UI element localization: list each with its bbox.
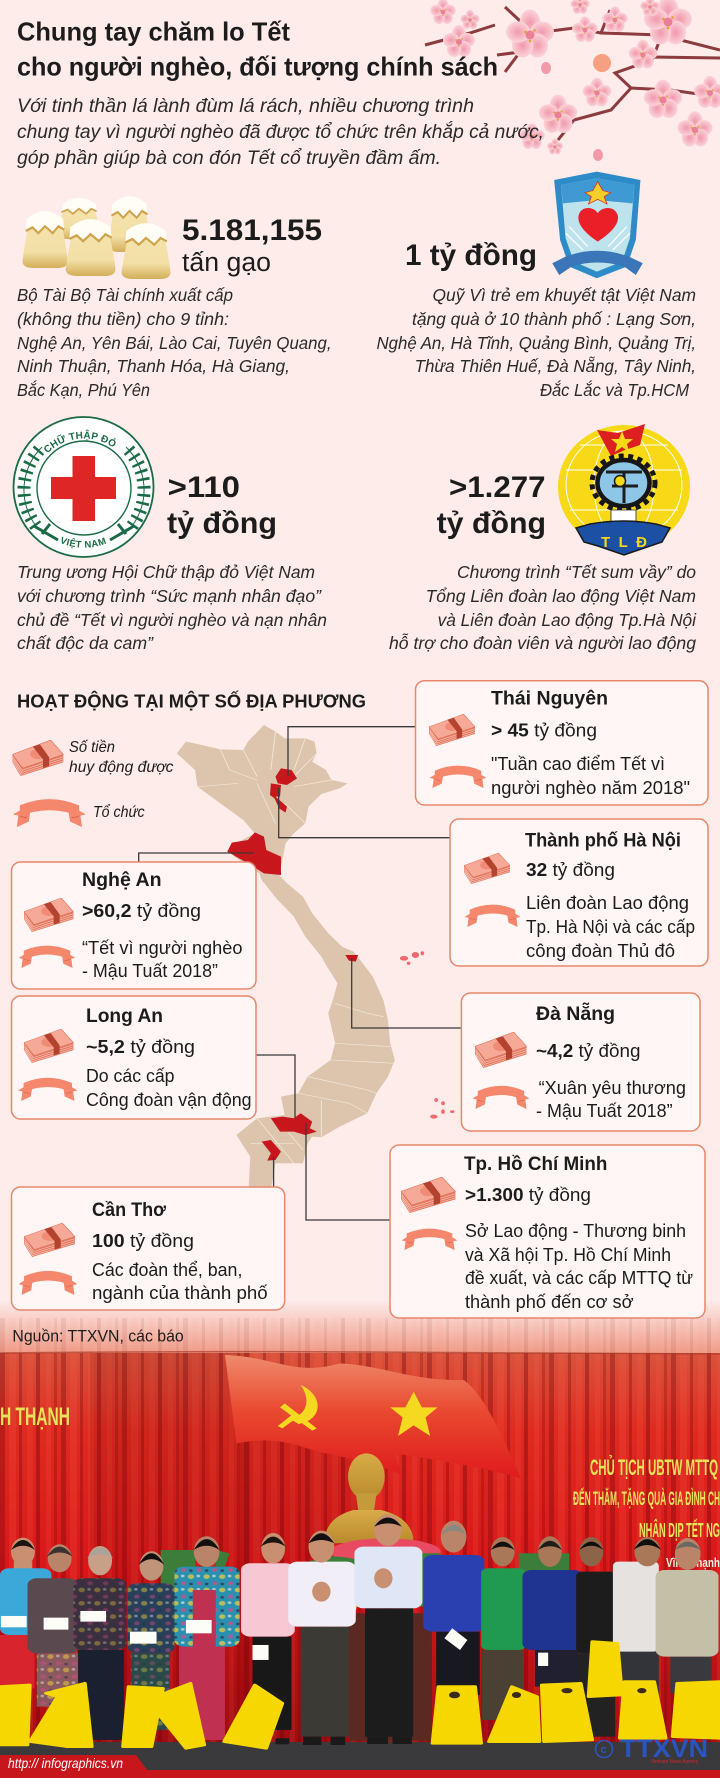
panel: Thái Nguyên: người nghèo năm 2018" (491, 778, 690, 798)
legend: Tổ chức (93, 803, 145, 821)
panel: Hà Nội: công đoàn Thủ đô (526, 941, 675, 961)
panel: TP. Hồ Chí Minh: và Xã hội Tp. Hồ Chí Minh (465, 1245, 671, 1265)
logo: TTXVN: Vietnam News Agency (651, 1759, 698, 1765)
panel: Nghệ An: “Tết vì người nghèo (82, 938, 242, 958)
panel: TP. Hồ Chí Minh: Tp. Hồ Chí Minh (464, 1153, 607, 1175)
text: rice description: Ninh Thuận, Thanh Hóa, Hà Giang, (17, 356, 290, 376)
panel: Đà Nẵng: Đà Nẵng (536, 1001, 615, 1025)
intro text: chung tay vì người nghèo đã được tổ chức trên khắp cả nước, (17, 120, 544, 143)
icon: red cross logo (12, 416, 154, 558)
intro text: Với tinh thần lá lành đùm lá rách, nhiều chương trình (17, 95, 474, 117)
text: fund description: Đắc Lắc và Tp.HCM (540, 380, 689, 400)
panel: TP. Hồ Chí Minh: đề xuất, và các cấp MTTQ từ (465, 1268, 693, 1288)
icon: red cross logo: VIỆT NAM (62, 536, 106, 548)
panel: Nghệ An: - Mậu Tuất 2018” (82, 961, 218, 981)
text: rice description: Bộ Tài Bộ Tài chính xuất cấp (17, 285, 233, 305)
text: trade union description: và Liên đoàn Lao động Tp.Hà Nội (438, 610, 697, 630)
stat: red cross: >110 (168, 471, 240, 504)
panel: Long An (12, 996, 256, 1119)
stat: rice: 5.181,155 (182, 214, 322, 247)
text: fund description: Nghệ An, Hà Tĩnh, Quảng Bình, Quảng Trị, (376, 333, 696, 353)
title: cho người nghèo, đối tượng chính sách (17, 51, 498, 81)
panel: Đà Nẵng: “Xuân yêu thương (539, 1078, 686, 1098)
photo: aid ceremony scene (0, 1300, 720, 1778)
title (17, 17, 498, 81)
panel: Long An: Do các cấp (86, 1066, 174, 1086)
intro text: góp phần giúp bà con đón Tết cổ truyền đầm ấm. (17, 147, 441, 169)
stat: rice (182, 214, 322, 277)
title: Chung tay chăm lo Tết (17, 17, 290, 47)
text: red cross description: Trung ương Hội Chữ thập đỏ Việt Nam (17, 562, 315, 582)
text: trade union description (389, 562, 697, 653)
text: red cross description (17, 562, 327, 653)
panel: Cần Thơ (12, 1187, 285, 1310)
panel: Cần Thơ: Cần Thơ (92, 1199, 166, 1221)
text: red cross description: với chương trình “Sức mạnh nhân đạo” (17, 586, 322, 606)
text: rice description (17, 285, 332, 400)
stat: rice: tấn gạo (182, 249, 271, 277)
text: trade union description: Tổng Liên đoàn lao động Việt Nam (426, 586, 696, 606)
text: fund description: Thừa Thiên Huế, Đà Nẵng, Tây Ninh, (415, 356, 696, 376)
text: red cross description: chất độc da cam” (17, 633, 154, 653)
panel: Hà Nội: 32 tỷ đồng (526, 860, 615, 880)
section heading: HOẠT ĐỘNG TẠI MỘT SỐ ĐỊA PHƯƠNG (17, 691, 366, 712)
stat: trade union: tỷ đồng (437, 507, 546, 540)
panel: TP. Hồ Chí Minh: >1.300 tỷ đồng (465, 1185, 591, 1205)
panel: Thái Nguyên: Thái Nguyên (491, 688, 608, 710)
panel: Nghệ An: >60,2 tỷ đồng (82, 901, 201, 921)
logo: TTXVN (596, 1735, 708, 1765)
panel: Thái Nguyên: "Tuần cao điểm Tết vì (491, 754, 665, 774)
text: rice description: (không thu tiền) cho 9 tỉnh: (17, 309, 229, 329)
text: fund description (376, 285, 696, 400)
logo: TTXVN: TTXVN (620, 1735, 708, 1763)
text: red cross description: chủ đề “Tết vì người nghèo và nạn nhân (17, 610, 327, 630)
text: rice description: Bắc Kạn, Phú Yên (17, 380, 150, 400)
text: rice description: Nghệ An, Yên Bái, Lào Cai, Tuyên Quang, (17, 333, 332, 353)
panel: Nghệ An: Nghệ An (82, 869, 162, 891)
panel: Cần Thơ: ngành của thành phố (92, 1283, 268, 1303)
stat: trade union: >1.277 (449, 471, 546, 504)
panel: Thái Nguyên: > 45 tỷ đồng (491, 721, 597, 741)
stat: red cross (167, 471, 277, 540)
panel: Đà Nẵng (461, 993, 700, 1131)
text: trade union description: Chương trình “Tết sum vầy” do (457, 562, 696, 582)
text: fund description: tặng quà ở 10 thành phố : Lạng Sơn, (412, 309, 696, 329)
icon: trade union logo: TLĐ (601, 534, 647, 551)
panel: Hà Nội: Liên đoàn Lao động (526, 893, 689, 913)
panel: Hà Nội: Thành phố Hà Nội (525, 830, 681, 852)
footer tab: website: http:// infographics.vn (8, 1755, 123, 1771)
map of Vietnam (177, 725, 455, 1203)
panel: Nghệ An (12, 862, 256, 989)
panel: Hà Nội: Tp. Hà Nội và các cấp (526, 917, 695, 937)
panel: Long An: ~5,2 tỷ đồng (86, 1037, 195, 1057)
panel: TP. Hồ Chí Minh (390, 1145, 705, 1318)
photo: banner wording (0, 1403, 720, 1570)
panel: Hà Nội (450, 819, 708, 966)
icon: rice sacks (22, 196, 170, 279)
text: fund description: Quỹ Vì trẻ em khuyết tật Việt Nam (432, 285, 696, 305)
panel: Long An: Công đoàn vận động (86, 1090, 252, 1110)
text: trade union description: hỗ trợ cho đoàn viên và người lao động (389, 633, 696, 653)
source note: Nguồn: TTXVN, các báo (12, 1328, 184, 1346)
panel: TP. Hồ Chí Minh: thành phố đến cơ sở (465, 1292, 634, 1312)
stat: 1 billion: 1 tỷ đồng (405, 239, 537, 272)
icon: red cross logo: CHỮ THẬP ĐỎ (44, 430, 116, 452)
connector lines (139, 727, 461, 1220)
stat: red cross: tỷ đồng (167, 507, 277, 540)
panel: TP. Hồ Chí Minh: Sở Lao động - Thương binh (465, 1221, 686, 1241)
panel: Cần Thơ: Các đoàn thể, ban, (92, 1260, 242, 1280)
stat: trade union (437, 471, 546, 540)
illustration: peach blossom branch (425, 0, 720, 161)
icon: trade union logo (558, 424, 690, 555)
legend: huy động được (69, 759, 174, 776)
panel: Long An: Long An (86, 1005, 163, 1027)
photo: group of people with gift bags (0, 1514, 720, 1748)
intro text (17, 95, 544, 169)
panel: Cần Thơ: 100 tỷ đồng (92, 1231, 194, 1251)
logo: TTXVN: c (600, 1744, 607, 1756)
icon: children fund shield (552, 172, 643, 278)
photo: banner wording: H THẠNH (0, 1403, 70, 1431)
legend (12, 739, 174, 827)
panel: Thái Nguyên (416, 681, 708, 805)
panel: Đà Nẵng: ~4,2 tỷ đồng (536, 1041, 640, 1061)
panel: Đà Nẵng: - Mậu Tuất 2018” (536, 1101, 673, 1121)
legend: Số tiền (69, 739, 115, 756)
